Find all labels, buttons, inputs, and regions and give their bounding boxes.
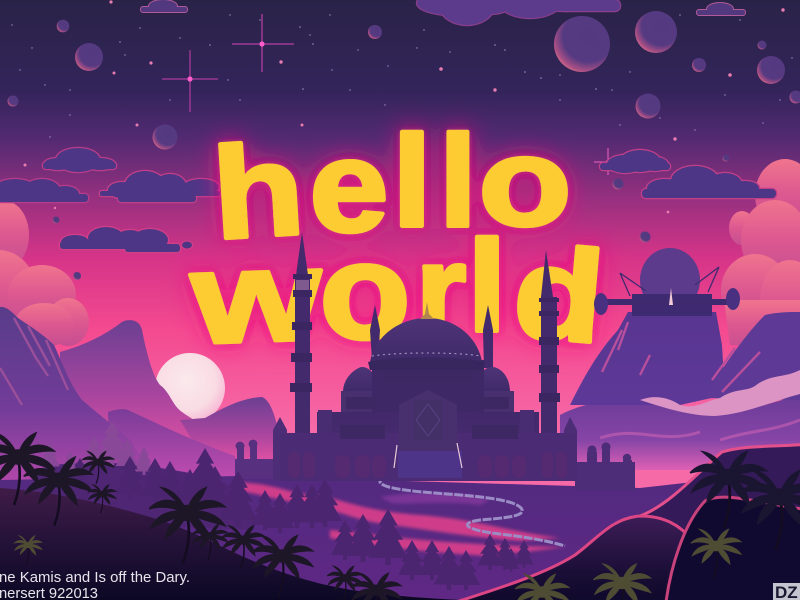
central portal xyxy=(399,390,457,478)
conifer trees mid xyxy=(69,448,534,590)
left platform and small towers xyxy=(235,440,275,479)
dome rim xyxy=(368,358,485,370)
palms olive lit xyxy=(14,529,741,600)
stair lights xyxy=(394,443,462,468)
word: world: r xyxy=(416,217,466,363)
word: hello: l xyxy=(439,109,477,254)
planets xyxy=(8,11,800,280)
windows xyxy=(340,372,518,439)
word: world: d xyxy=(508,219,609,371)
sparkle star two xyxy=(162,50,218,112)
left mountain xyxy=(0,307,150,490)
word: world: w xyxy=(188,221,325,371)
satellite station xyxy=(594,248,740,316)
conifer trees far xyxy=(40,421,154,475)
word: world: o xyxy=(320,217,410,368)
caption text xyxy=(0,570,190,600)
mid forest mass xyxy=(35,462,255,530)
word: hello: o xyxy=(479,113,571,252)
pink valley streams xyxy=(238,482,565,556)
purple clouds xyxy=(0,0,776,252)
glowing pink dots xyxy=(24,0,785,213)
inner minarets xyxy=(370,305,493,368)
stars xyxy=(11,14,793,138)
caption text: ne Kamis and Is off the Dary. xyxy=(0,570,190,586)
right minaret xyxy=(539,250,560,437)
right hill front xyxy=(665,497,800,600)
low right mountains xyxy=(560,395,800,470)
mid body xyxy=(317,412,539,478)
back mountains xyxy=(60,320,280,480)
word: hello: l xyxy=(392,108,432,254)
word: hello: e xyxy=(310,113,388,259)
side domes xyxy=(341,367,514,413)
word: world: l xyxy=(467,213,507,359)
right peak xyxy=(570,312,725,405)
word: hello: h xyxy=(209,116,308,267)
main dome xyxy=(370,318,482,362)
pink cumulus cloud left xyxy=(0,201,89,347)
dome light row xyxy=(372,353,481,356)
far right peak xyxy=(602,312,800,400)
left minaret xyxy=(290,232,312,435)
lower wings xyxy=(273,417,577,480)
word: world xyxy=(188,213,609,371)
sun xyxy=(155,353,225,423)
sparkle star three xyxy=(594,148,622,175)
sparkle star one xyxy=(232,14,294,72)
left foreground hill xyxy=(0,488,460,600)
right platform and small towers xyxy=(575,442,635,490)
arches xyxy=(288,452,567,478)
cloud band on mountains xyxy=(640,370,800,416)
right hill back xyxy=(640,444,800,600)
dome finial xyxy=(420,302,434,319)
winding road xyxy=(380,478,565,546)
front stairs xyxy=(398,451,462,478)
corner blocks xyxy=(318,410,534,440)
pink cumulus cloud right xyxy=(721,159,800,350)
right hill middle xyxy=(450,516,692,600)
title: hello world xyxy=(188,108,609,371)
main drum xyxy=(372,360,484,420)
valley ground xyxy=(0,470,800,600)
mosque xyxy=(235,232,635,490)
palms right dark xyxy=(690,452,800,550)
palms left dark xyxy=(0,433,401,600)
word: hello xyxy=(209,108,571,267)
